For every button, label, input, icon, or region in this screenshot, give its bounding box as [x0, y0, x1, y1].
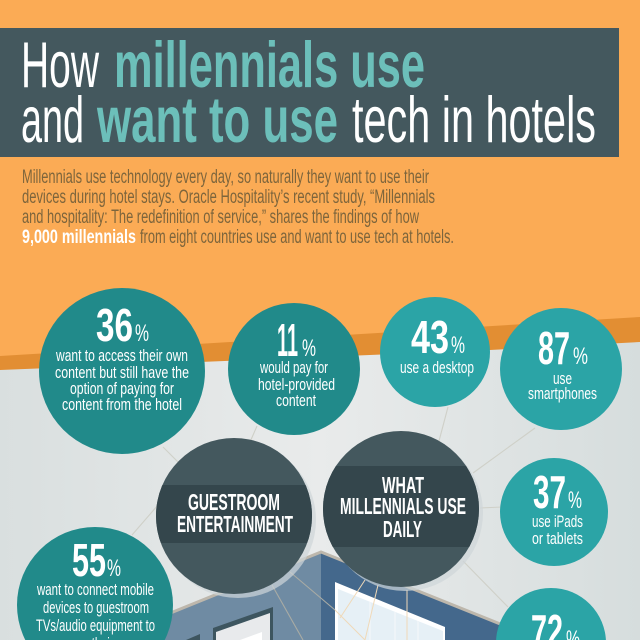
title line 1: How	[21, 28, 100, 101]
intro paragraph: devices during hotel stays. Oracle Hospitality’s recent study, “Millennials	[22, 187, 435, 208]
stat: 36%: content but still have the	[55, 363, 189, 382]
title line 1: millennials use	[114, 28, 425, 101]
stat: 11%: would pay for	[259, 358, 328, 377]
stat: 87%: smartphones	[528, 384, 597, 403]
stat: 36%: %	[135, 320, 149, 347]
intro paragraph	[22, 167, 454, 248]
stat: 87%: 87	[538, 322, 570, 374]
left window	[186, 607, 273, 640]
darker orange band	[0, 317, 640, 380]
connector lines	[132, 407, 535, 640]
title bar	[0, 28, 619, 157]
stat: 43%	[380, 297, 490, 407]
stat: 72%	[496, 588, 606, 640]
stat: 11%	[228, 303, 360, 435]
stat: 37%	[500, 458, 608, 566]
building illustration	[104, 552, 540, 640]
hub: what millennials use daily: WHAT	[382, 472, 424, 498]
stat: 43%: use a desktop	[400, 358, 474, 377]
stat: 36%: option of paying for	[70, 379, 174, 398]
hub: what millennials use daily: MILLENNIALS USE	[340, 493, 466, 519]
intro paragraph: from eight countries use and want to use tech at hotels.	[140, 227, 454, 248]
stat: 36%: 36	[96, 299, 133, 351]
hub: what millennials use daily: DAILY	[383, 516, 422, 542]
stat: 87%	[500, 308, 622, 430]
stat: 55%: TVs/audio equipment to	[36, 616, 155, 635]
stat: 11%: %	[302, 335, 316, 362]
stat: 55%: want to connect mobile	[36, 580, 154, 599]
stat: 11%: hotel-provided	[258, 375, 335, 394]
stat: 87%: use	[553, 369, 572, 388]
intro paragraph: Millennials use technology every day, so naturally they want to use their	[22, 167, 429, 188]
stat: 43%: 43	[411, 311, 449, 363]
stat: 55%: 55	[72, 534, 106, 586]
intro paragraph: 9,000 millennials	[22, 227, 136, 248]
stat: 11%: content	[276, 391, 316, 410]
stat: 43%: %	[451, 332, 465, 359]
title line 1	[21, 28, 425, 101]
stat: 36%: want to access their own	[55, 346, 188, 365]
stat: 11%: 11	[277, 314, 298, 366]
right window	[335, 580, 445, 640]
stat: 37%: %	[568, 487, 582, 514]
stat: 36%: content from the hotel	[62, 395, 182, 414]
title line 2: want to use	[96, 83, 338, 156]
stat: 55%	[17, 527, 173, 640]
light wall background	[0, 342, 640, 640]
stat: 37%: or tablets	[532, 529, 583, 548]
stat: 87%: %	[573, 343, 588, 370]
stat: 55%: devices to guestroom	[43, 598, 149, 617]
hub: guestroom entertainment: GUESTROOM	[188, 489, 280, 515]
stat: 37%: 37	[533, 466, 566, 518]
intro paragraph: and hospitality: The redefinition of service,” shares the findings of how	[22, 207, 419, 228]
stat: 55%: %	[107, 555, 121, 582]
title line 2: and	[21, 83, 84, 156]
stat: 37%: use iPads	[532, 512, 583, 531]
stat: 36%	[39, 288, 205, 454]
hub: what millennials use daily	[320, 431, 485, 591]
hub: guestroom entertainment: ENTERTAINMENT	[177, 511, 293, 537]
hub: guestroom entertainment	[150, 438, 320, 598]
title line 2	[21, 83, 596, 156]
